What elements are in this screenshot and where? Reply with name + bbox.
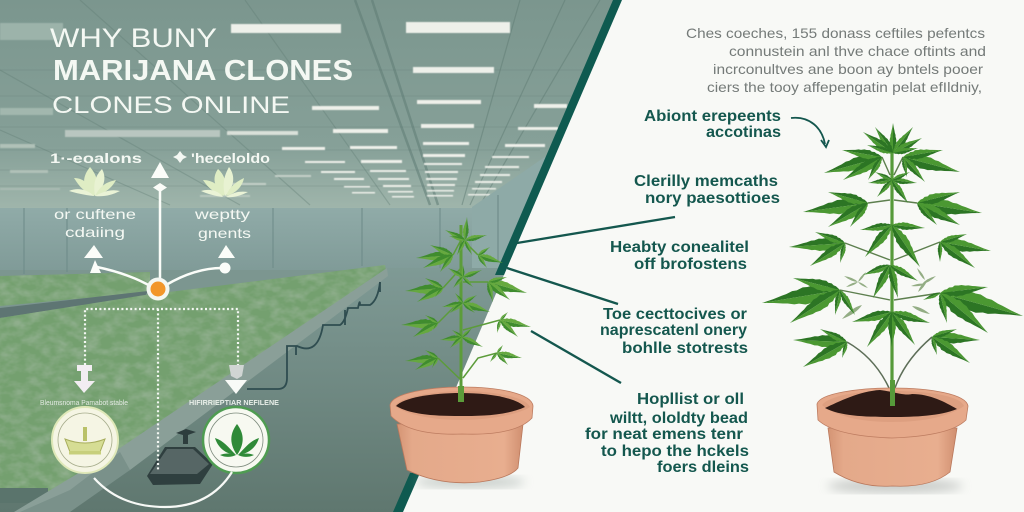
callout 5: foers dleins xyxy=(657,459,749,476)
small pot shadow xyxy=(415,476,525,488)
callout 5 xyxy=(585,391,749,476)
callout 1: accotinas xyxy=(706,124,781,141)
benefit right: caption xyxy=(194,206,251,241)
orange hub xyxy=(146,278,170,300)
ceiling beams and grid xyxy=(0,0,600,205)
back wall xyxy=(0,208,640,270)
drip tray xyxy=(147,447,213,485)
leader lines xyxy=(507,217,675,383)
small pot xyxy=(390,386,533,483)
intro paragraph: connustein anl thve chace oftints and xyxy=(729,43,986,59)
main plant bed xyxy=(0,265,386,502)
ceiling xyxy=(0,0,640,208)
back plant bed xyxy=(0,272,150,306)
icon: right leaf xyxy=(201,167,248,197)
benefit right: star xyxy=(173,151,187,163)
small plant stem and branches xyxy=(438,225,500,402)
floor xyxy=(0,268,520,512)
label: left badge: Bleumsnoma Pamabot stable xyxy=(40,398,128,407)
arrow: curved pointer to plant xyxy=(791,118,829,147)
callout 2 xyxy=(634,173,780,207)
large plant leaves xyxy=(761,123,1024,372)
callout 5: to hepo the hckels xyxy=(601,443,749,460)
large plant stem and branches xyxy=(840,140,940,405)
callout 4: bohlle stotrests xyxy=(622,340,748,357)
intro paragraph: incrconultves ane boon ay bntels pooer xyxy=(713,61,983,77)
intro paragraph: Ches coeches, 155 donass ceftiles pefentcs xyxy=(686,25,985,41)
title: MARIJANA CLONES xyxy=(53,55,353,87)
drip tubing xyxy=(247,282,380,389)
benefit left: caption: or cuftene xyxy=(54,206,136,222)
icon: right badge leaf xyxy=(203,407,269,473)
intro paragraph: ciers the tooy affepengatin pelat efIldniy, xyxy=(707,79,982,95)
callout 5: Hopllist or oll xyxy=(637,391,744,408)
title: CLONES ONLINE xyxy=(52,92,290,119)
wall base behind beds xyxy=(0,270,520,470)
title xyxy=(50,23,353,119)
small plant in pot xyxy=(390,217,533,488)
dotted connectors xyxy=(85,309,238,470)
callout 4: Toe cecttocives or xyxy=(603,306,747,323)
large pot xyxy=(817,380,968,486)
large pot shadow xyxy=(827,479,963,493)
benefit left: heading: 1·-eoalons xyxy=(50,150,142,166)
callout 5: for neat emens tenr xyxy=(585,426,743,443)
callout 3: off brofostens xyxy=(634,256,747,273)
wall panel seams xyxy=(24,208,440,274)
title: WHY BUNY xyxy=(50,23,217,53)
small plant leaves xyxy=(401,217,532,373)
callout 3: Heabty conealitel xyxy=(610,239,749,256)
callout 2: Clerilly memcaths xyxy=(634,173,778,190)
ceiling lights xyxy=(0,22,567,198)
divider stripe xyxy=(393,0,622,512)
callout 1: Abiont erepeents xyxy=(644,108,781,125)
callout 3 xyxy=(610,239,749,273)
benefit right: heading: 'heceloldo xyxy=(191,150,270,166)
panel: grow room photo background xyxy=(0,0,640,512)
large plant in pot xyxy=(761,123,1024,493)
large plant flower clusters xyxy=(841,267,937,321)
label: right badge: HIFIRRIEPTIAR NEFILENE xyxy=(189,398,279,407)
connector arc xyxy=(94,472,232,507)
icon: left badge tray xyxy=(52,407,118,473)
callout 5: wiltt, ololdty bead xyxy=(609,410,748,427)
callout 1 xyxy=(644,108,781,141)
benefit left: caption: cdaiing xyxy=(65,224,125,240)
icon: left leaf xyxy=(69,167,120,196)
arrow: down left xyxy=(74,365,95,393)
bed curb xyxy=(14,268,388,512)
benefit right: caption: gnents xyxy=(198,225,251,241)
intro paragraph xyxy=(686,25,986,95)
benefit left: caption xyxy=(54,206,136,240)
callout 2: nory paesottioes xyxy=(645,190,780,207)
right wall xyxy=(472,150,555,300)
callout 4: naprescatenl onery xyxy=(600,322,747,339)
benefit right: caption: weptty xyxy=(194,206,250,222)
arrow network: branching lines from hub xyxy=(84,162,235,300)
bed foliage texture xyxy=(0,265,386,502)
panel: white content area xyxy=(403,0,1024,512)
arrow: down right xyxy=(225,365,247,394)
callout 4 xyxy=(600,306,748,357)
